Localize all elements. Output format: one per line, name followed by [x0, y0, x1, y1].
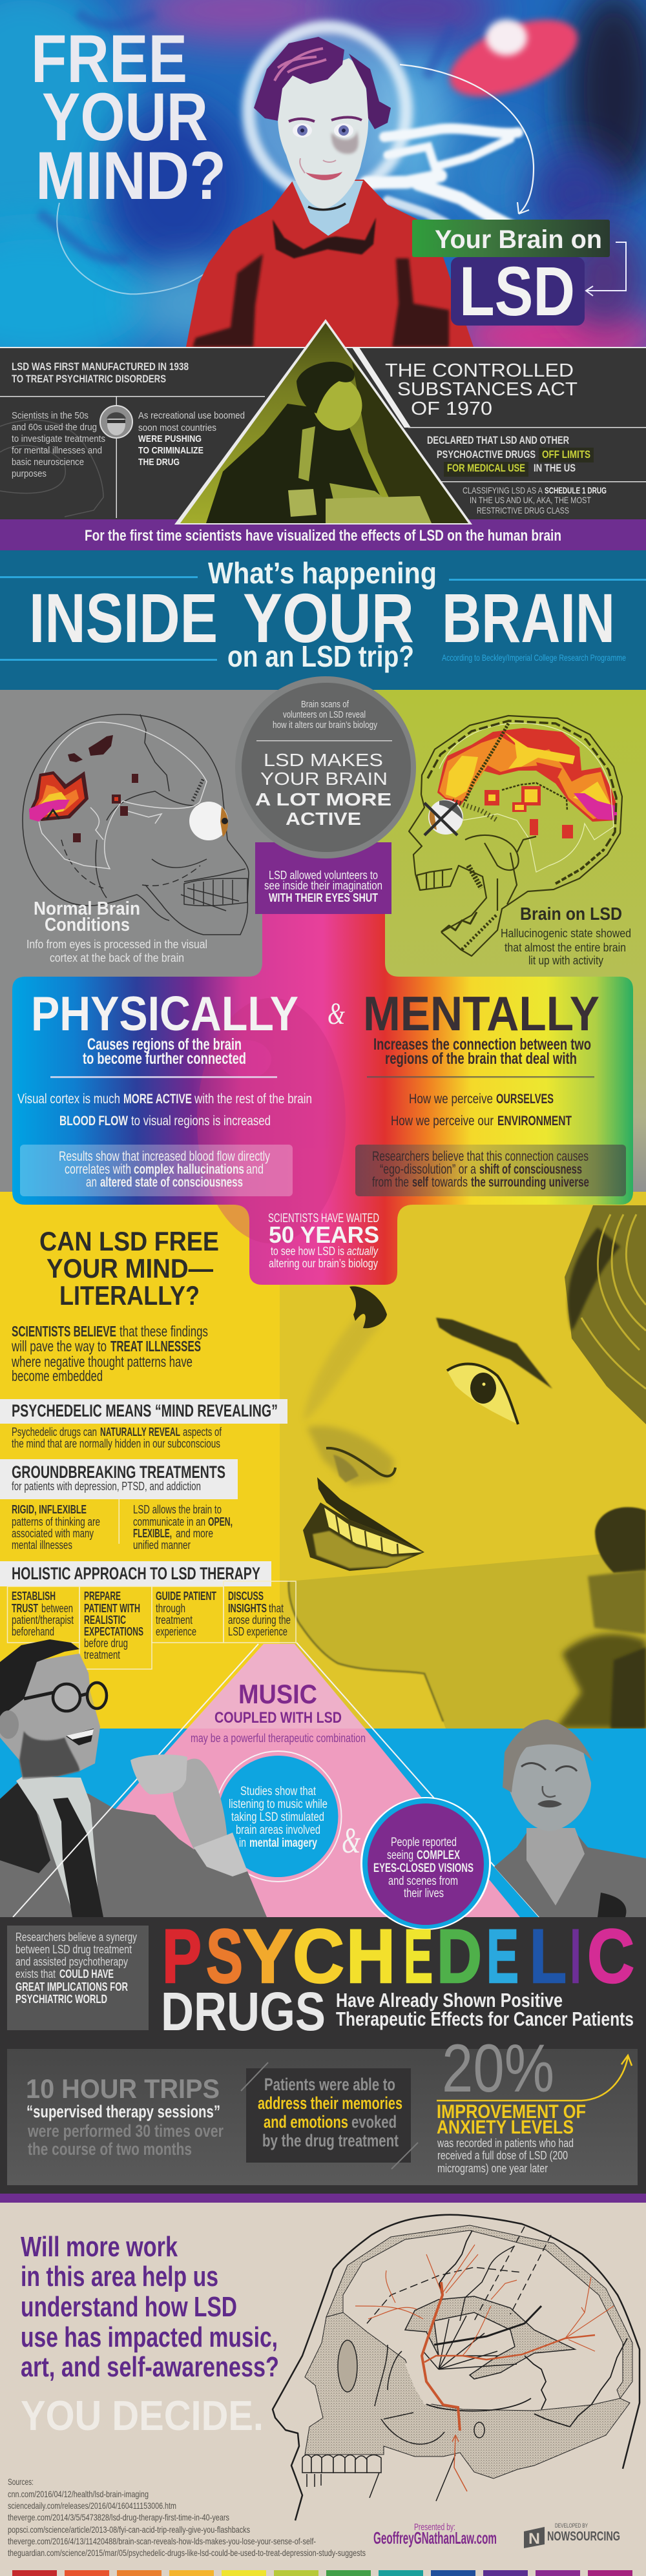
- step 4: discuss insights: LSD experience: [228, 1625, 287, 1638]
- heading box: holistic approach: [0, 1561, 271, 1586]
- callout: memories and emotions: [241, 2062, 418, 2169]
- text: physically subhead: Causes regions of the brain: [87, 1035, 242, 1054]
- heading: Psychedelic rainbow letters: I: [570, 1914, 581, 1999]
- text: perception facts: [391, 1092, 572, 1128]
- heading: Psychedelic rainbow letters: L: [530, 1914, 567, 1999]
- sources list: [8, 2477, 366, 2558]
- text: rigid inflexible: associated with many: [12, 1526, 94, 1540]
- text: open flexible: FLEXIBLE,: [133, 1526, 172, 1540]
- icon: faint head x-ray: [0, 420, 103, 517]
- text: therapeutic combination: may be a powerful therapeutic combination: [191, 1732, 366, 1745]
- callout: memories and emotions: address their memories: [258, 2093, 402, 2113]
- text: first manufactured: [12, 361, 189, 385]
- ampersand: &: [342, 1821, 360, 1861]
- stat: improvement of anxiety levels: received a full dose of LSD (200: [437, 2148, 568, 2162]
- step 4: discuss insights: INSIGHTS: [228, 1601, 267, 1615]
- step 1: establish trust: patient/therapist: [12, 1613, 74, 1626]
- section: closing beige: [0, 2203, 646, 2576]
- text: LSD makes your brain a lot more active: A LOT MORE: [255, 789, 391, 809]
- text: scientists in the 50s: and 60s used the drug: [12, 422, 97, 433]
- title: Free Your Mind?: YOUR: [42, 79, 208, 155]
- heading: What's happening: What’s happening: [208, 556, 437, 590]
- sources list: cnn.com/2016/04/12/health/lsd-brain-imaging: [8, 2489, 149, 2499]
- callout: blood flow results: complex hallucinations: [134, 1162, 244, 1177]
- text: visual cortex facts: [17, 1092, 312, 1128]
- divider band: purple: [0, 2194, 646, 2203]
- callout: blood flow results: an: [86, 1175, 97, 1190]
- presented by credit: [373, 2522, 497, 2548]
- callout: blood flow results: and: [246, 1162, 264, 1177]
- subheading: therapeutic effects: [336, 1989, 634, 2030]
- stat: improvement of anxiety levels: ANXIETY LEVELS: [437, 2117, 574, 2138]
- callout: blood flow results: correlates with: [65, 1162, 131, 1177]
- heading: Psychedelic rainbow letters: Y: [243, 1914, 293, 1999]
- callout: memories and emotions: and emotions: [264, 2112, 348, 2132]
- circle: people reported: COMPLEX: [417, 1849, 460, 1862]
- callout: synergy: [7, 1926, 149, 2030]
- hero section: [0, 0, 646, 371]
- step 3: guide patient: treatment: [156, 1613, 193, 1626]
- hero psychedelic background: [0, 0, 646, 371]
- therapy steps grid: [8, 1581, 296, 1669]
- text: rigid inflexible: mental illnesses: [12, 1538, 72, 1552]
- label: normal brain conditions: [34, 898, 140, 935]
- callout: ego dissolution: self: [412, 1175, 429, 1190]
- text: scientists in the 50s: basic neuroscience: [12, 457, 84, 468]
- sources list: theverge.com/2014/3/5/5473828/lsd-drug-therapy-first-time-in-40-years: [8, 2512, 229, 2522]
- text: first manufactured: LSD WAS FIRST MANUFACTURED IN 1938: [12, 361, 189, 373]
- step 1: establish trust: between: [41, 1601, 73, 1615]
- heading: Psychedelic rainbow letters: S: [206, 1914, 243, 1999]
- text: controlled substances act: SUBSTANCES ACT: [397, 379, 578, 400]
- heading: Physically: PHYSICALLY: [31, 986, 298, 1041]
- text: scientists in the 50s: [12, 410, 105, 479]
- text: scientists in the 50s: Scientists in the 50s: [12, 410, 89, 421]
- heading: Psychedelic rainbow letters: H: [346, 1914, 395, 1999]
- label: Your Brain on LSD: [412, 220, 626, 330]
- step 2: prepare patient: PATIENT WITH: [84, 1601, 140, 1615]
- sources list: Sources:: [8, 2477, 34, 2487]
- callout: memories and emotions: Patients were able to: [264, 2075, 395, 2094]
- label: normal brain conditions: Conditions: [45, 915, 130, 935]
- suit body: [0, 1778, 267, 1917]
- question text: use has impacted music,: [21, 2322, 278, 2353]
- rainbow cross panel: [12, 914, 633, 1285]
- text: schedule 1 drug: CLASSIFYING LSD AS A: [463, 485, 543, 495]
- text: brain scans: volunteers on LSD reveal: [283, 709, 366, 720]
- text: open flexible: and more: [176, 1526, 213, 1540]
- photo: boy with eyes closed: [494, 1719, 646, 1917]
- text: physically subhead: to become further connected: [83, 1050, 246, 1068]
- callout: ego dissolution: towards: [432, 1175, 468, 1190]
- heading: Can LSD free your mind: LITERALLY?: [59, 1280, 200, 1311]
- step 2: prepare patient: EXPECTATIONS: [84, 1625, 143, 1638]
- text: open flexible: communicate in an: [133, 1515, 205, 1528]
- text: perception facts: How we perceive our: [391, 1114, 494, 1128]
- text: recreational use: TO CRIMINALIZE: [138, 445, 203, 456]
- text: recreational use: As recreational use boomed: [138, 410, 245, 421]
- dark suit side: [0, 1780, 50, 1873]
- step 2: prepare patient: PREPARE: [84, 1589, 121, 1603]
- heading: Inside Your Brain: YOUR: [243, 579, 414, 657]
- text: mentally subhead: [373, 1035, 591, 1068]
- step 2: prepare patient: before drug: [84, 1636, 128, 1650]
- label: Your Brain on LSD: Your Brain on: [435, 225, 602, 254]
- faded face overlay: [197, 998, 346, 1243]
- text: schedule 1 drug: SCHEDULE 1 DRUG: [545, 485, 607, 495]
- photo: Nixon in triangle: [174, 317, 478, 526]
- section: psychedelic drugs dark background: [0, 1917, 646, 2194]
- callout: synergy: GREAT IMPLICATIONS FOR: [16, 1980, 128, 1993]
- text: scientists in the 50s: purposes: [12, 468, 47, 479]
- heading: Mentally: MENTALLY: [363, 986, 599, 1041]
- title: Free Your Mind?: MIND?: [36, 138, 226, 214]
- text: off limits declaration: PSYCHOACTIVE DRUGS: [437, 449, 536, 461]
- teeth: [302, 2455, 381, 2487]
- question text: understand how LSD: [21, 2291, 237, 2323]
- step 1: establish trust: ESTABLISH: [12, 1589, 56, 1603]
- text: open flexible: LSD allows the brain to: [133, 1502, 222, 1516]
- step 4: discuss insights: [228, 1589, 291, 1638]
- panel: circle callout: [235, 676, 416, 914]
- step 3: guide patient: through: [156, 1601, 185, 1615]
- heading box: psychedelic means mind revealing: [0, 1399, 287, 1424]
- stat: improvement of anxiety levels: IMPROVEMENT OF: [437, 2101, 586, 2123]
- text: studies show music: mental imagery: [249, 1836, 317, 1850]
- sources list: theguardian.com/science/2015/mar/05/psychedelic-drugs-like-lsd-could-be-used-to-treat-depression-study-suggests: [8, 2548, 366, 2558]
- text: visual cortex facts: MORE ACTIVE: [123, 1092, 192, 1106]
- stat: 10 hour trips: [26, 2073, 224, 2159]
- text: open flexible: OPEN,: [208, 1515, 233, 1528]
- presented by credit: Presented by:: [414, 2522, 455, 2533]
- callout: synergy: COULD HAVE: [59, 1967, 114, 1980]
- text: studies show music: [229, 1785, 328, 1850]
- text: brain scans: how it alters our brain’s biology: [273, 720, 377, 731]
- text: controlled substances act: OF 1970: [411, 399, 492, 419]
- text: studies show music: Studies show that: [240, 1785, 317, 1798]
- label: normal brain conditions: Normal Brain: [34, 898, 140, 919]
- text: studies show music: in: [239, 1836, 246, 1850]
- callout: ego dissolution: the surrounding universe: [471, 1175, 589, 1190]
- stat: 10 hour trips: 10 HOUR TRIPS: [26, 2073, 220, 2104]
- heading: Can LSD free your mind: CAN LSD FREE: [39, 1226, 219, 1256]
- illustration: head cross-section: [273, 2215, 640, 2520]
- heading box: holistic approach: HOLISTIC APPROACH TO LSD THERAPY: [12, 1564, 260, 1583]
- text: rigid inflexible: [12, 1502, 100, 1552]
- question text: Will more work: [21, 2231, 178, 2263]
- callout: 50 years: 50 YEARS: [269, 1221, 379, 1248]
- text: LSD makes your brain a lot more active: LSD MAKES: [264, 750, 383, 770]
- panel: statistics: [7, 2031, 638, 2185]
- banner: first time visualized: [0, 519, 646, 550]
- purple box: eyes shut: [255, 842, 391, 914]
- callout: ego dissolution: from the: [372, 1175, 409, 1190]
- step 3: guide patient: GUIDE PATIENT: [156, 1589, 216, 1603]
- text: perception facts: How we perceive: [409, 1092, 493, 1106]
- text: scientists believe: SCIENTISTS BELIEVE: [12, 1323, 116, 1340]
- stat: 10 hour trips: the course of two months: [28, 2139, 192, 2159]
- text: scientists believe: [11, 1323, 208, 1384]
- heading: Psychedelic rainbow letters: E: [404, 1914, 433, 1999]
- step 1: establish trust: TRUST: [12, 1601, 38, 1615]
- necktie: [53, 1798, 103, 1917]
- text: scientists believe: that these findings: [120, 1323, 208, 1340]
- heading: Psychedelic rainbow letters: [162, 1914, 634, 1999]
- text: naturally reveal: aspects of: [183, 1425, 222, 1439]
- step 4: discuss insights: arose during the: [228, 1613, 291, 1626]
- circle: people reported: People reported: [391, 1836, 457, 1849]
- sources list: theverge.com/2016/4/13/11420488/brain-scan-reveals-how-lds-makes-you-lose-your-sense-of-self-: [8, 2536, 316, 2546]
- callout: memories and emotions: by the drug treatment: [262, 2131, 399, 2150]
- heading: Psychedelic rainbow letters: P: [162, 1914, 202, 1999]
- heading: Inside Your Brain: INSIDE: [29, 579, 218, 657]
- ventricle: [405, 2296, 575, 2379]
- step 3: guide patient: [156, 1589, 216, 1638]
- text: brain scans: Brain scans of: [301, 699, 349, 710]
- icon: curved arc arrow to label: [400, 65, 534, 214]
- callout: synergy: exists that: [16, 1967, 56, 1980]
- text: controlled substances act: [385, 360, 578, 419]
- text: off limits declaration: IN THE US: [534, 462, 576, 474]
- text: perception facts: ENVIRONMENT: [497, 1114, 572, 1128]
- text: info from eyes: [26, 938, 207, 964]
- text: scientists believe: will pave the way to: [11, 1338, 107, 1355]
- text: rigid inflexible: RIGID, INFLEXIBLE: [12, 1502, 87, 1516]
- callout: memories and emotions: evoked: [351, 2112, 397, 2132]
- callout: synergy: between LSD drug treatment: [16, 1942, 132, 1956]
- text: hallucinogenic state: Hallucinogenic state showed: [501, 927, 631, 940]
- text: studies show music: taking LSD stimulated: [231, 1811, 324, 1824]
- heading box: groundbreaking treatments: GROUNDBREAKING TREATMENTS: [12, 1462, 225, 1482]
- shirt front: [16, 1776, 100, 1917]
- logo: NowSourcing: N: [528, 2530, 540, 2548]
- ampersand: &: [328, 997, 345, 1031]
- illustration: skull on LSD: [409, 716, 622, 956]
- step 1: establish trust: beforehand: [12, 1625, 54, 1638]
- callout: ego dissolution: “ego-dissolution” or a: [380, 1162, 476, 1177]
- text: off limits declaration: [427, 435, 594, 477]
- callout: ego dissolution: [355, 1145, 626, 1196]
- purple box: eyes shut: LSD allowed volunteers to: [269, 869, 378, 882]
- triangle: music: [19, 1643, 539, 1917]
- text: hallucinogenic state: [501, 927, 631, 967]
- circle: people reported: their lives: [404, 1887, 444, 1900]
- heading: Can LSD free your mind: YOUR MIND—: [47, 1253, 213, 1283]
- callout: synergy: Researchers believe a synergy: [16, 1930, 138, 1944]
- logo: NowSourcing: [524, 2522, 620, 2548]
- heading: music coupled with LSD: COUPLED WITH LSD: [214, 1709, 342, 1727]
- section: What's happening inside your brain: [0, 550, 646, 690]
- text: open flexible: unified manner: [133, 1538, 191, 1552]
- text: info from eyes: cortex at the back of the brain: [50, 951, 184, 964]
- text: recreational use: soon most countries: [138, 422, 216, 433]
- callout: 50 years: altering our brain’s biology: [269, 1257, 378, 1270]
- line: triangle left edge: [13, 1644, 258, 1917]
- step 4: discuss insights: DISCUSS: [228, 1589, 264, 1603]
- heading: music coupled with LSD: MUSIC: [238, 1679, 317, 1709]
- step 2: prepare patient: treatment: [84, 1648, 120, 1661]
- logo: NowSourcing: DEVELOPED BY: [555, 2522, 588, 2529]
- sources list: sciencedaily.com/releases/2016/04/160411153006.htm: [8, 2500, 176, 2511]
- text: naturally reveal: Psychedelic drugs can: [12, 1425, 97, 1439]
- text: physically subhead: [83, 1035, 246, 1068]
- heading: on an LSD trip: on an LSD trip?: [227, 639, 414, 673]
- text: rigid inflexible: patterns of thinking are: [12, 1515, 100, 1528]
- figure: man in red sweater: [186, 37, 474, 347]
- internal dark lines: [367, 2227, 627, 2501]
- text: studies show music: listening to music while: [229, 1798, 328, 1811]
- section: music blue background: [0, 1729, 646, 1917]
- stat: 10 hour trips: “supervised therapy sessions”: [26, 2102, 220, 2121]
- circle: people reported: and scenes from: [388, 1875, 458, 1888]
- stippled cranium band: [326, 2225, 632, 2398]
- presented by credit: GeoffreyGNathanLaw.com: [373, 2528, 497, 2548]
- purple box: eyes shut: see inside their imagination: [264, 879, 382, 892]
- text: visual cortex facts: BLOOD FLOW: [59, 1114, 128, 1128]
- callout: synergy: and assisted psychotherapy: [16, 1955, 129, 1968]
- text: scientists believe: where negative thought patterns have: [11, 1353, 193, 1370]
- text: schedule 1 drug: RESTRICTIVE DRUG CLASS: [477, 505, 569, 515]
- callout: synergy: PSYCHIATRIC WORLD: [16, 1992, 107, 2006]
- sources list: popsci.com/science/article/2013-08/fyi-can-acid-trip-really-give-you-flashbacks: [8, 2524, 250, 2535]
- text: LSD makes your brain a lot more active: YOUR BRAIN: [260, 769, 388, 789]
- callout: ego dissolution: shift of consciousness: [479, 1162, 582, 1177]
- heading: music coupled with LSD: [214, 1679, 342, 1727]
- text: you decide: YOU DECIDE.: [21, 2392, 264, 2439]
- photo: man with cup: [0, 1639, 267, 1917]
- question text: art, and self-awareness?: [21, 2351, 279, 2383]
- text: scientists in the 50s: to investigate treatments: [12, 433, 105, 444]
- text: off limits declaration: DECLARED THAT LSD AND OTHER: [427, 435, 569, 446]
- logo: NowSourcing: NOWSOURCING: [547, 2529, 620, 2544]
- step 2: prepare patient: [84, 1589, 143, 1661]
- text: controlled substances act: THE CONTROLLED: [385, 360, 574, 381]
- callout: 50 years: to see how LSD is actually: [271, 1245, 379, 1258]
- text: open flexible: [133, 1502, 233, 1552]
- stat: improvement of anxiety levels: micrograms) one year later: [437, 2161, 548, 2175]
- text: first manufactured: TO TREAT PSYCHIATRIC DISORDERS: [12, 373, 166, 385]
- text: schedule 1 drug: IN THE US AND UK, AKA, THE MOST: [470, 495, 591, 505]
- text: scientists believe: become embedded: [12, 1367, 103, 1384]
- callout: 50 years: SCIENTISTS HAVE WAITED: [268, 1212, 379, 1225]
- text: info from eyes: Info from eyes is processed in the visual: [26, 938, 207, 951]
- text: LSD makes your brain a lot more active: [255, 750, 391, 829]
- orbit and sinus hollows: [338, 2340, 357, 2392]
- circle: people reported: seeing: [387, 1849, 413, 1862]
- icon: rising arrow: [437, 2055, 632, 2101]
- panel: LSD history: [0, 347, 646, 520]
- heading: Inside Your Brain: [29, 579, 615, 657]
- title: Free Your Mind?: FREE: [31, 21, 187, 97]
- stat: improvement of anxiety levels: was recorded in patients who had: [437, 2136, 574, 2150]
- step 3: guide patient: experience: [156, 1625, 196, 1638]
- text: off limits declaration: FOR MEDICAL USE: [447, 462, 525, 474]
- stat: 20 percent: 20%: [442, 2031, 554, 2106]
- text: visual cortex facts: to visual regions is increased: [131, 1114, 271, 1128]
- heading: Psychedelic rainbow letters: D: [437, 1914, 482, 1999]
- callout: blood flow results: [20, 1145, 293, 1196]
- illustration: skull normal: [23, 714, 249, 935]
- text: LSD makes your brain a lot more active: ACTIVE: [286, 809, 361, 829]
- subheading: therapeutic effects: Have Already Shown Positive: [336, 1989, 563, 2011]
- callout: blood flow results: Results show that increased blood flow directly: [59, 1149, 270, 1164]
- text: naturally reveal: the mind that are normally hidden in our subconscious: [12, 1437, 220, 1450]
- heading: Can LSD free your mind: [39, 1226, 219, 1311]
- text: brain scans: [273, 699, 377, 731]
- purple box: eyes shut: WITH THEIR EYES SHUT: [269, 891, 378, 904]
- text: schedule 1 drug: [463, 485, 607, 515]
- text: scientists in the 50s: for mental illnesses and: [12, 445, 102, 456]
- text: studies show music: brain areas involved: [236, 1823, 320, 1837]
- panel: brain on LSD: [323, 690, 646, 1192]
- text: hallucinogenic state: lit up with activity: [528, 954, 603, 967]
- heading: Psychedelic rainbow letters: E: [486, 1914, 519, 1999]
- red nerve lines: [355, 2245, 614, 2491]
- rainbow footer bar: [12, 2570, 632, 2576]
- heading box: groundbreaking treatments: [0, 1459, 238, 1499]
- step 1: establish trust: [12, 1589, 74, 1638]
- text: mentally subhead: regions of the brain that deal with: [385, 1050, 577, 1068]
- text: recreational use: WERE PUSHING: [138, 433, 202, 444]
- label: brain on LSD: Brain on LSD: [520, 904, 622, 924]
- circle: studies show: [214, 1751, 341, 1882]
- panel: yellow background: [0, 1192, 646, 1729]
- outer head profile: [273, 2215, 640, 2520]
- stat: 10 hour trips: were performed 30 times over: [27, 2121, 224, 2141]
- text: recreational use: THE DRUG: [138, 457, 180, 468]
- text: visual cortex facts: Visual cortex is much: [17, 1092, 120, 1106]
- panel: normal brain: [0, 690, 323, 1192]
- text: perception facts: OURSELVES: [496, 1092, 554, 1106]
- question text: [21, 2231, 279, 2383]
- circle: people reported: [360, 1797, 491, 1930]
- title: Free Your Mind?: [31, 21, 226, 214]
- question text: in this area help us: [21, 2261, 218, 2292]
- text: naturally reveal: NATURALLY REVEAL: [100, 1425, 180, 1439]
- heading box: psychedelic means mind revealing: PSYCHEDELIC MEANS “MIND REVEALING”: [12, 1401, 278, 1420]
- photo: smiling woman tinted yellow: [280, 1192, 646, 1729]
- decorative circle arc left of figure: [57, 203, 208, 294]
- icon: scientist portrait: [100, 406, 132, 438]
- step 4: discuss insights: that: [269, 1601, 284, 1615]
- photo: cup and hand: [130, 1754, 247, 1876]
- heading box: groundbreaking treatments: for patients with depression, PTSD, and addiction: [12, 1479, 201, 1493]
- stippled face and skull base bone: [305, 2312, 630, 2478]
- step 2: prepare patient: REALISTIC: [84, 1613, 126, 1626]
- label: Your Brain on LSD: LSD: [459, 252, 575, 330]
- text: naturally reveal: [12, 1425, 222, 1450]
- text: hallucinogenic state: that almost the entire brain: [505, 941, 626, 954]
- text: recreational use: [138, 410, 245, 468]
- callout: blood flow results: altered state of consciousness: [100, 1175, 243, 1190]
- text: visual cortex facts: with the rest of the brain: [194, 1092, 312, 1106]
- text: scientists believe: TREAT ILLNESSES: [110, 1338, 201, 1355]
- heading: Psychedelic rainbow letters: C: [293, 1914, 344, 1999]
- callout: 50 years: [268, 1212, 379, 1270]
- heading: Psychedelic rainbow letters: C: [587, 1914, 634, 1999]
- stat: improvement of anxiety levels: [437, 2101, 586, 2175]
- head: [0, 1654, 100, 1780]
- text: off limits declaration: OFF LIMITS: [542, 449, 590, 461]
- circle: people reported: EYES-CLOSED VISIONS: [373, 1862, 474, 1875]
- heading: Drugs: DRUGS: [161, 1981, 326, 2042]
